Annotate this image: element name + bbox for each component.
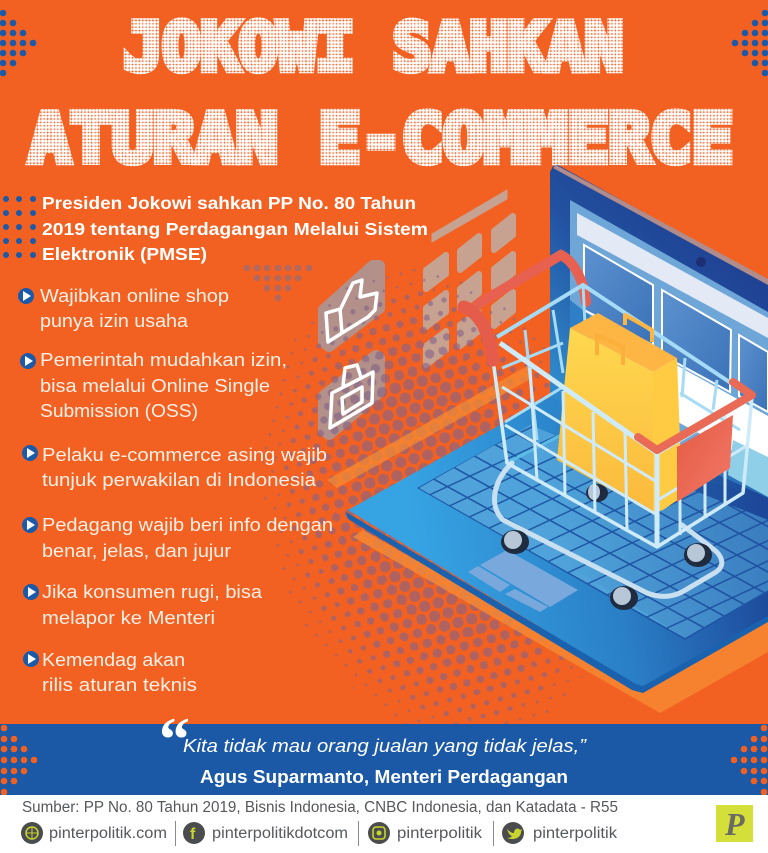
title: ATURAN E-COMMERCE — [29, 99, 733, 177]
bullet list — [18, 286, 333, 695]
bullet 4 — [22, 515, 333, 561]
source line: Sumber: PP No. 80 Tahun 2019, Bisnis Indonesia, CNBC Indonesia, dan Katadata - R55 — [22, 799, 618, 816]
title: JOKOWI SAHKAN — [124, 10, 623, 85]
decorative blue dots: top right arrow — [732, 10, 768, 76]
bullet 2 — [20, 350, 287, 421]
cart flag — [677, 415, 733, 502]
bullet 1: Wajibkan online shop — [40, 286, 229, 306]
bullet 2: Submission (OSS) — [40, 401, 198, 421]
cart left handle — [464, 307, 493, 360]
laptop base — [348, 397, 768, 687]
cart back handle — [478, 255, 586, 304]
bullet 2: bisa melalui Online Single — [40, 376, 270, 396]
twitter — [502, 822, 617, 844]
icon: shopping bag — [330, 365, 373, 428]
intro text: 2019 tentang Perdagangan Melalui Sistem — [42, 219, 428, 239]
app tiles — [426, 190, 513, 365]
intro text: Elektronik (PMSE) — [42, 244, 207, 264]
quote band — [0, 706, 768, 795]
icon: thumbs up — [326, 280, 377, 342]
laptop screen — [570, 200, 768, 497]
bullet 6: rilis aturan teknis — [42, 675, 197, 695]
bullet 5 — [23, 582, 263, 628]
instagram — [368, 822, 482, 844]
cart back wires — [497, 285, 752, 473]
quote attribution: Agus Suparmanto, Menteri Perdagangan — [200, 767, 568, 787]
touchpad — [468, 550, 578, 612]
quotation mark: “ — [159, 706, 190, 774]
icon: webcam — [696, 257, 706, 267]
bullet 5: melapor ke Menteri — [42, 608, 215, 628]
facebook — [183, 822, 348, 844]
cart base tube — [494, 463, 722, 596]
laptop screen bezel — [550, 165, 768, 510]
website — [21, 822, 167, 844]
title — [29, 10, 733, 177]
logo — [716, 805, 753, 842]
decorative mauve dot triangle — [244, 265, 312, 301]
decorative blue dots: top left arrow — [0, 10, 36, 76]
laptop base rim — [346, 512, 768, 693]
icon tile: shopping bag background — [324, 356, 379, 434]
bullet 1: punya izin usaha — [40, 311, 189, 331]
logo: P — [724, 806, 745, 842]
decorative orange dots left — [1, 725, 37, 795]
website: pinterpolitik.com — [49, 825, 167, 842]
laptop band behind — [327, 366, 532, 488]
bullet 4: benar, jelas, dan jujur — [42, 541, 231, 561]
bullet 3: Pelaku e-commerce asing wajib — [42, 445, 327, 465]
laptop shadow slab — [353, 530, 768, 713]
bullet 5: Jika konsumen rugi, bisa — [42, 582, 263, 602]
cart front wires — [493, 343, 752, 547]
cart rear wheel — [586, 484, 608, 502]
intro text: Presiden Jokowi sahkan PP No. 80 Tahun — [42, 193, 416, 213]
shopping bag — [557, 313, 682, 513]
intro text — [42, 193, 428, 264]
facebook: f — [190, 826, 196, 843]
facebook: pinterpolitikdotcom — [212, 825, 348, 842]
shopping cart — [464, 255, 752, 610]
bullet 6: Kemendag akan — [42, 650, 185, 670]
instagram: pinterpolitik — [397, 825, 482, 842]
laptop — [327, 165, 768, 713]
bullet 2: Pemerintah mudahkan izin, — [40, 350, 287, 370]
decorative orange dots right — [731, 725, 767, 795]
footer — [0, 795, 768, 853]
bullet 3: tunjuk perwakilan di Indonesia — [42, 470, 317, 490]
keyboard — [417, 425, 768, 640]
icon tile: thumbs up background — [324, 266, 379, 346]
bullet 1 — [18, 286, 229, 331]
laptop top edge highlight — [553, 165, 768, 285]
bullet 4: Pedagang wajib beri info dengan — [42, 515, 333, 535]
cart right handle — [638, 382, 752, 450]
bullet 6 — [23, 650, 197, 695]
bullet 3 — [22, 445, 327, 490]
halftone dots — [212, 229, 668, 781]
decorative blue dot grid beside intro — [3, 196, 36, 258]
cart wheels — [501, 530, 712, 610]
quote text: Kita tidak mau orang jualan yang tidak jelas,” — [183, 736, 587, 756]
twitter: pinterpolitik — [533, 825, 617, 842]
